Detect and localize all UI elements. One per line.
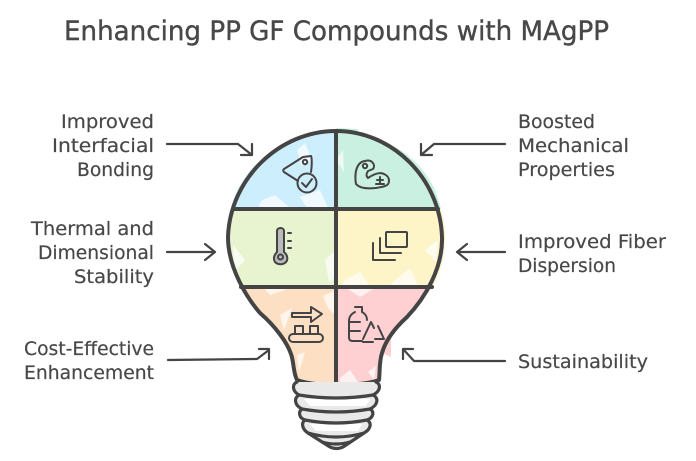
label: Thermal and Dimensional Stability: Stability: [74, 266, 154, 288]
panel: blue quadrant: [231, 131, 336, 209]
icon: stacked layers: [373, 232, 407, 260]
icon: flexed arm: [355, 161, 389, 188]
arrow: Sustainability: [403, 349, 505, 361]
icon: price tag with check: [283, 156, 316, 192]
label: Boosted Mechanical Properties: [518, 111, 629, 181]
arrow: Thermal and Dimensional Stability: [167, 244, 215, 260]
panel: mint quadrant: [336, 128, 441, 209]
label: Boosted Mechanical Properties: Mechanical: [518, 135, 629, 157]
title: Enhancing PP GF Compounds with MAgPP: [64, 16, 609, 47]
light bulb: [228, 128, 445, 448]
label: Improved Interfacial Bonding: Interfacial: [52, 135, 154, 157]
panel: green quadrant: [228, 209, 336, 286]
label: Cost-Effective Enhancement: [24, 338, 154, 384]
paint gaps: [233, 143, 438, 382]
label: Improved Interfacial Bonding: Improved: [61, 111, 154, 133]
label: Thermal and Dimensional Stability: Dimensional: [38, 242, 154, 264]
arrow: Improved Fiber Dispersion: [457, 244, 505, 260]
screw base: [293, 382, 379, 448]
panel: orange quadrant: [240, 286, 336, 385]
label: Improved Interfacial Bonding: [52, 111, 154, 181]
bulb outline: [228, 131, 442, 385]
arrow: Improved Interfacial Bonding: [167, 144, 252, 155]
label: Improved Fiber Dispersion: [518, 231, 666, 277]
label: Thermal and Dimensional Stability: [30, 218, 154, 288]
base silhouette: [293, 382, 379, 448]
label: Improved Fiber Dispersion: Dispersion: [518, 255, 616, 277]
label: Improved Fiber Dispersion: Improved Fiber: [518, 231, 666, 253]
label: Cost-Effective Enhancement: Enhancement: [24, 362, 154, 384]
icon: conveyor belt with arrow: [289, 307, 323, 342]
label: Boosted Mechanical Properties: Boosted: [518, 111, 595, 133]
label: Boosted Mechanical Properties: Properties: [518, 159, 615, 181]
dividers: [233, 131, 438, 385]
label: Sustainability: Sustainability: [518, 351, 648, 373]
panel: yellow quadrant: [336, 209, 445, 286]
label: Improved Interfacial Bonding: Bonding: [77, 159, 154, 181]
white highlights: [304, 399, 370, 431]
panel: pink quadrant: [336, 286, 433, 385]
label: Cost-Effective Enhancement: Cost-Effective: [24, 338, 154, 360]
label: Thermal and Dimensional Stability: Thermal and: [30, 218, 154, 240]
icon: thermometer: [274, 228, 291, 264]
arrow: Cost-Effective Enhancement: [168, 349, 269, 360]
icon: bottle and recycle: [349, 307, 384, 342]
ring lines: [299, 395, 373, 444]
arrow: Boosted Mechanical Properties: [421, 144, 505, 155]
